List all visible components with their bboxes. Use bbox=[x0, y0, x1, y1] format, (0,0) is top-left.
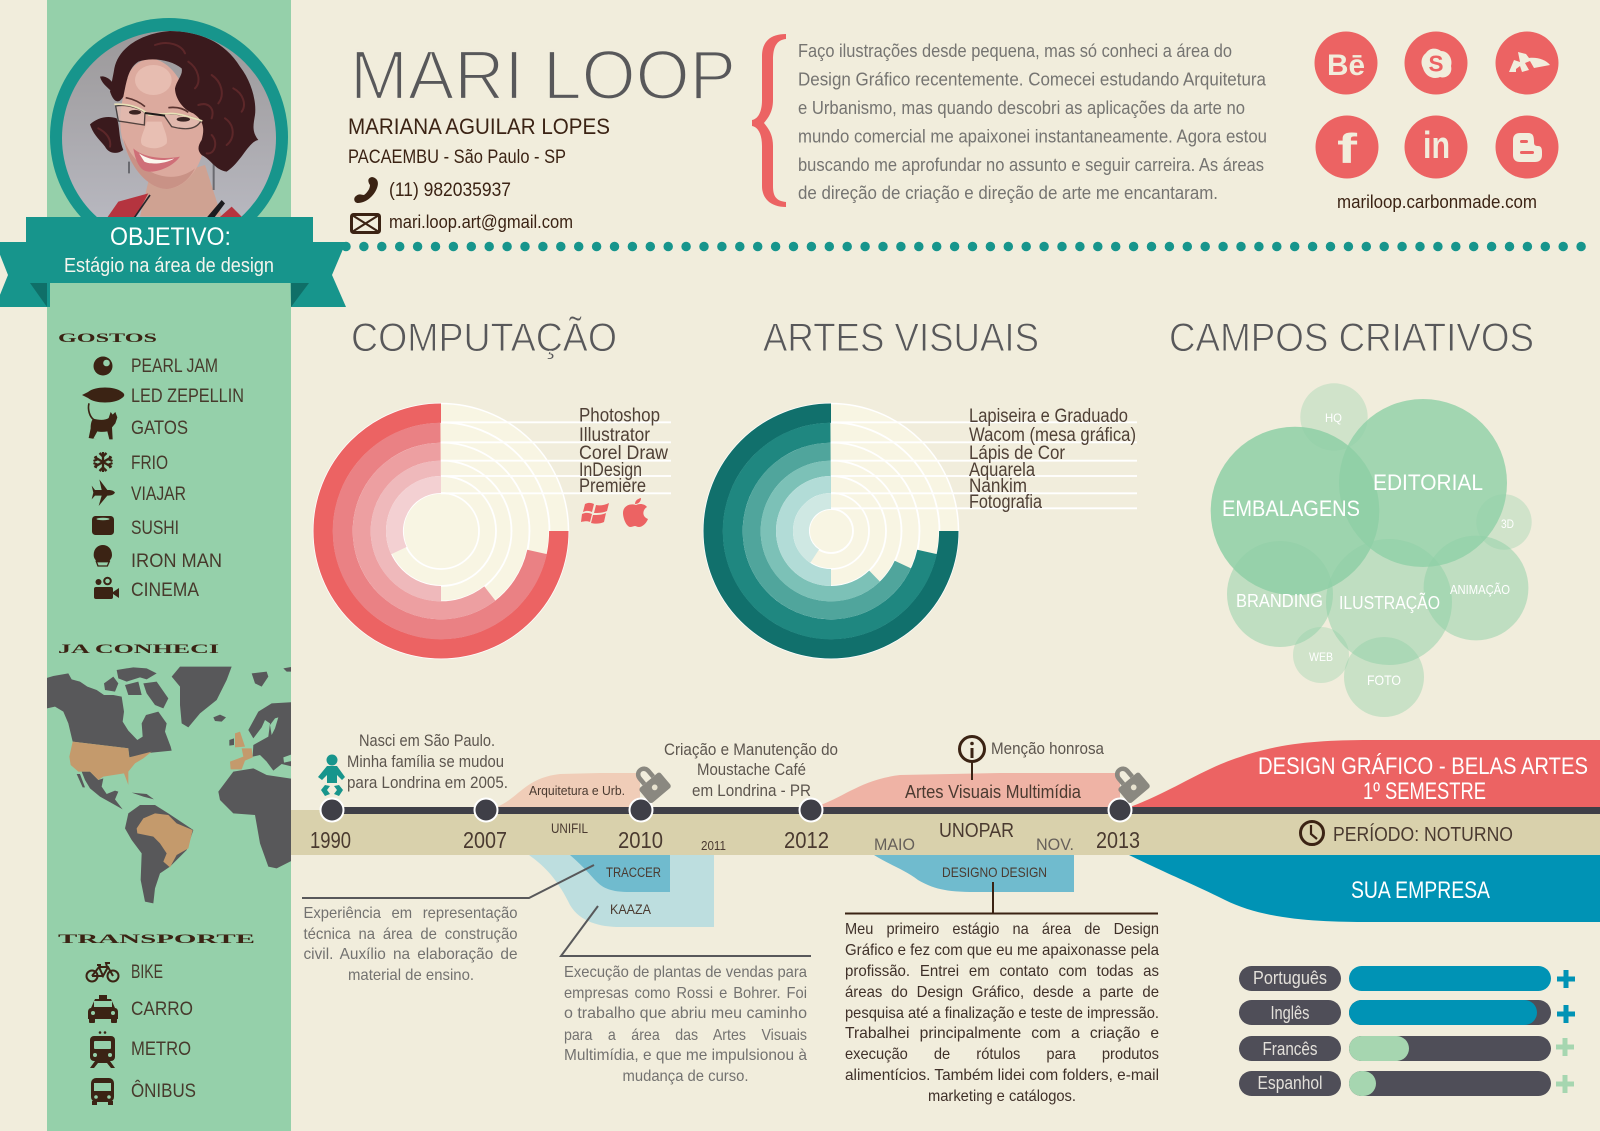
led zepellin bbox=[82, 386, 244, 407]
icon: lock bbox=[628, 760, 672, 804]
milestone text: nascimento: Minha família se mudou bbox=[347, 753, 504, 771]
text block: designo: Trabalhei principalmente com a criação e bbox=[845, 1025, 1159, 1042]
list: gostos bbox=[82, 356, 244, 601]
frances: Francês bbox=[1262, 1039, 1318, 1059]
label: lapis de cor: Lápis de Cor bbox=[969, 443, 1066, 464]
gatos: GATOS bbox=[131, 418, 188, 439]
milestone text: nascimento: Nasci em São Paulo. bbox=[359, 732, 495, 750]
led zepellin: LED ZEPELLIN bbox=[131, 386, 244, 407]
milestone text: nascimento: para Londrina em 2005. bbox=[347, 774, 508, 792]
bio paragraph bbox=[798, 41, 1267, 203]
cinema bbox=[94, 578, 199, 601]
icon: blogger bbox=[1513, 133, 1542, 162]
label: editorial: EDITORIAL bbox=[1373, 470, 1483, 495]
bio paragraph: Design Gráfico recentemente. Comecei estudando Arquitetura bbox=[798, 70, 1267, 90]
text block: kaaza: mudança de curso. bbox=[622, 1068, 748, 1085]
text block: designo: áreas do Design Gráfico, desde a parte de bbox=[845, 984, 1159, 1001]
icon: clock bbox=[1300, 822, 1324, 844]
traccer label: TRACCER bbox=[606, 865, 661, 880]
text block: kaaza: Execução de plantas de vendas para bbox=[564, 964, 807, 981]
icon: linkedin: in bbox=[1423, 125, 1450, 167]
bio paragraph: de direção de criação e direção de arte me encantaram. bbox=[798, 183, 1218, 203]
label: illustrator: Illustrator bbox=[579, 425, 651, 446]
radial chart: computacao bbox=[314, 404, 671, 658]
viajar bbox=[92, 479, 186, 506]
label: lapiseira: Lapiseira e Graduado bbox=[969, 406, 1128, 427]
label: web: WEB bbox=[1309, 650, 1333, 664]
heading: artes visuais: ARTES VISUAIS bbox=[763, 316, 1039, 360]
icon: behance: Bē bbox=[1327, 49, 1365, 82]
timeline band bbox=[291, 810, 1600, 855]
connector: designo bbox=[845, 882, 1158, 914]
iron man: IRON MAN bbox=[131, 551, 222, 572]
metro: METRO bbox=[131, 1039, 191, 1060]
carro bbox=[88, 995, 193, 1023]
iron man bbox=[94, 545, 222, 572]
heading: campos criativos: CAMPOS CRIATIVOS bbox=[1169, 316, 1534, 360]
gatos bbox=[88, 403, 188, 439]
label: animacao: ANIMAÇÃO bbox=[1450, 583, 1510, 597]
viajar: VIAJAR bbox=[131, 484, 186, 505]
bio paragraph: e Urbanismo, mas quando descobri as aplicações da arte no bbox=[798, 98, 1245, 118]
text block: kaaza: Multimídia, e que me impulsionou à bbox=[564, 1047, 807, 1064]
ingles bbox=[1239, 1000, 1575, 1025]
icon: skype: S bbox=[1428, 50, 1444, 76]
text block: traccer: material de ensino. bbox=[348, 967, 474, 984]
full name: MARIANA AGUILAR LOPES bbox=[348, 114, 610, 139]
label: embalagens: EMBALAGENS bbox=[1222, 496, 1360, 521]
heading: transporte: TRANSPORTE bbox=[58, 931, 255, 946]
text block: kaaza: empresas como Rossi e Bohrer. Foi bbox=[564, 985, 807, 1002]
area: designo bbox=[874, 855, 1074, 892]
label: nankim: Nankim bbox=[969, 476, 1027, 497]
area: arquitetura bbox=[497, 773, 640, 807]
year 2011: 2011 bbox=[701, 838, 726, 853]
label: premiere: Premiere bbox=[579, 476, 646, 497]
social icons bbox=[1314, 32, 1558, 212]
cinema: CINEMA bbox=[131, 580, 199, 601]
pearl jam bbox=[94, 356, 218, 377]
heading: gostos: GOSTOS bbox=[58, 330, 157, 345]
area: traccer bbox=[570, 855, 670, 892]
portugues bbox=[1239, 966, 1575, 991]
bio paragraph: mundo comercial me apaixonei instantaneamente. Agora estou bbox=[798, 126, 1267, 146]
text block: kaaza bbox=[564, 964, 807, 1085]
ribbon: objetivo: Estágio na área de design bbox=[64, 255, 274, 277]
ribbon: objetivo bbox=[0, 217, 346, 307]
area: artes visuais multimidia bbox=[815, 773, 1120, 807]
arquitetura label: Arquitetura e Urb. bbox=[529, 783, 625, 798]
ribbon: objetivo: OBJETIVO: bbox=[110, 223, 231, 251]
icon: envelope bbox=[352, 214, 380, 232]
location: PACAEMBU - São Paulo - SP bbox=[348, 147, 566, 168]
email: mari.loop.art@gmail.com bbox=[389, 212, 573, 232]
text block: kaaza: o trabalho que abriu meu caminho bbox=[564, 1005, 807, 1022]
text block: designo: profissão. Entrei em contato com todas as bbox=[845, 963, 1159, 980]
milestone text: nascimento bbox=[347, 732, 508, 792]
nodes bbox=[320, 798, 1132, 822]
pearl jam: PEARL JAM bbox=[131, 356, 218, 377]
area: kaaza bbox=[529, 855, 714, 927]
text block: traccer: técnica na área de construção bbox=[304, 926, 518, 943]
icon: curly brace bbox=[752, 34, 786, 207]
unopar: UNOPAR bbox=[939, 820, 1014, 842]
portugues: Português bbox=[1253, 968, 1327, 988]
bio paragraph: Faço ilustrações desde pequena, mas só conheci a área do bbox=[798, 41, 1232, 61]
sua empresa label: SUA EMPRESA bbox=[1351, 877, 1490, 904]
year 2013: 2013 bbox=[1096, 827, 1140, 853]
label: ilustracao: ILUSTRAÇÃO bbox=[1339, 592, 1440, 613]
label: wacom: Wacom (mesa gráfica) bbox=[969, 425, 1136, 446]
label: fotografia: Fotografia bbox=[969, 492, 1042, 513]
area: design grafico bbox=[1130, 740, 1600, 807]
text block: designo: alimentícios. Também lidei com folders, e-mail bbox=[845, 1067, 1159, 1084]
label: foto: FOTO bbox=[1367, 672, 1401, 688]
text block: traccer bbox=[304, 905, 518, 984]
bubble chart: campos criativos bbox=[1211, 383, 1532, 717]
website: mariloop.carbonmade.com bbox=[1337, 192, 1537, 212]
text block: traccer: civil. Auxílio na elaboração de bbox=[304, 946, 518, 963]
dotted divider bbox=[346, 242, 1582, 251]
onibus bbox=[91, 1078, 196, 1105]
maio: MAIO bbox=[874, 835, 915, 854]
year 2007: 2007 bbox=[463, 827, 507, 853]
mencao honrosa: Menção honrosa bbox=[991, 740, 1105, 758]
frances bbox=[1239, 1036, 1574, 1061]
label: aquarela: Aquarela bbox=[969, 460, 1035, 481]
bio paragraph: buscando me aprofundar no assunto e seguir carreira. As áreas bbox=[798, 155, 1264, 175]
phone number: (11) 982035937 bbox=[389, 180, 511, 201]
frio bbox=[94, 452, 168, 474]
area: sua empresa bbox=[1129, 855, 1600, 922]
carro: CARRO bbox=[131, 999, 193, 1020]
milestone text: moustache cafe bbox=[664, 741, 838, 800]
connector: kaaza bbox=[561, 906, 811, 956]
text block: designo bbox=[845, 921, 1159, 1105]
novembro: NOV. bbox=[1036, 835, 1074, 854]
bike bbox=[86, 962, 163, 983]
text block: designo: execução de rótulos para produtos bbox=[845, 1046, 1159, 1063]
text block: designo: Gráfico e fez com que eu me apaixonasse pela bbox=[845, 942, 1159, 959]
year 2012: 2012 bbox=[784, 827, 829, 853]
espanhol bbox=[1239, 1071, 1574, 1096]
icon: apple bbox=[623, 498, 648, 527]
sushi: SUSHI bbox=[131, 518, 179, 539]
text block: designo: pesquisa até a finalização e teste de impressão. bbox=[845, 1005, 1159, 1022]
milestone text: moustache cafe: Criação e Manutenção do bbox=[664, 741, 838, 759]
periodo: PERÍODO: NOTURNO bbox=[1333, 823, 1513, 846]
espanhol: Espanhol bbox=[1258, 1073, 1322, 1093]
artes visuais label: Artes Visuais Multimídia bbox=[905, 782, 1082, 802]
label: corel draw: Corel Draw bbox=[579, 443, 668, 464]
timeline bar bbox=[331, 807, 1600, 814]
milestone text: moustache cafe: em Londrina - PR bbox=[692, 782, 811, 800]
label: hq: HQ bbox=[1325, 411, 1342, 425]
panel: sidebar bbox=[47, 0, 291, 1131]
icon: phone bbox=[354, 177, 378, 203]
connector: traccer bbox=[302, 865, 594, 898]
sushi bbox=[92, 516, 179, 539]
label: indesign: InDesign bbox=[579, 460, 642, 481]
metro bbox=[90, 1031, 191, 1068]
kaaza label: KAAZA bbox=[610, 902, 651, 917]
text block: traccer: Experiência em representação bbox=[304, 905, 518, 922]
icon: windows bbox=[581, 503, 609, 524]
ingles: Inglês bbox=[1270, 1003, 1310, 1023]
icon: facebook: f bbox=[1337, 125, 1358, 172]
text block: kaaza: para a área das Artes Visuais bbox=[564, 1027, 807, 1044]
label: photoshop: Photoshop bbox=[579, 406, 660, 426]
text block: designo: marketing e catálogos. bbox=[928, 1088, 1076, 1105]
world map bbox=[40, 667, 300, 903]
text block: designo: Meu primeiro estágio na área de Design bbox=[845, 921, 1159, 938]
unifil: UNIFIL bbox=[551, 820, 588, 836]
year 2010: 2010 bbox=[618, 827, 663, 853]
portrait photo bbox=[50, 18, 288, 217]
icon: lock bbox=[1107, 760, 1151, 804]
radial chart: artes visuais bbox=[704, 404, 1137, 658]
title: MARI LOOP bbox=[350, 36, 736, 114]
list: transporte bbox=[86, 962, 196, 1105]
year 1990: 1990 bbox=[310, 827, 351, 853]
languages bbox=[1239, 966, 1575, 1096]
label: 3d: 3D bbox=[1501, 517, 1514, 531]
icon: skype bbox=[1422, 49, 1452, 78]
frio: FRIO bbox=[131, 453, 168, 474]
timeline bbox=[291, 732, 1600, 956]
icon: deviantart bbox=[1509, 52, 1550, 72]
bike: BIKE bbox=[131, 962, 163, 983]
label: branding: BRANDING bbox=[1236, 591, 1323, 611]
icon: baby bbox=[318, 754, 345, 796]
milestone text: moustache cafe: Moustache Café bbox=[697, 761, 806, 779]
semestre label: 1º SEMESTRE bbox=[1363, 778, 1486, 805]
designo label: DESIGNO DESIGN bbox=[942, 864, 1047, 880]
heading: computacao: COMPUTAÇÃO bbox=[351, 315, 617, 360]
icon: info pin bbox=[960, 736, 984, 780]
heading: ja conheci: JA CONHECI bbox=[58, 641, 219, 656]
onibus: ÔNIBUS bbox=[131, 1080, 196, 1102]
